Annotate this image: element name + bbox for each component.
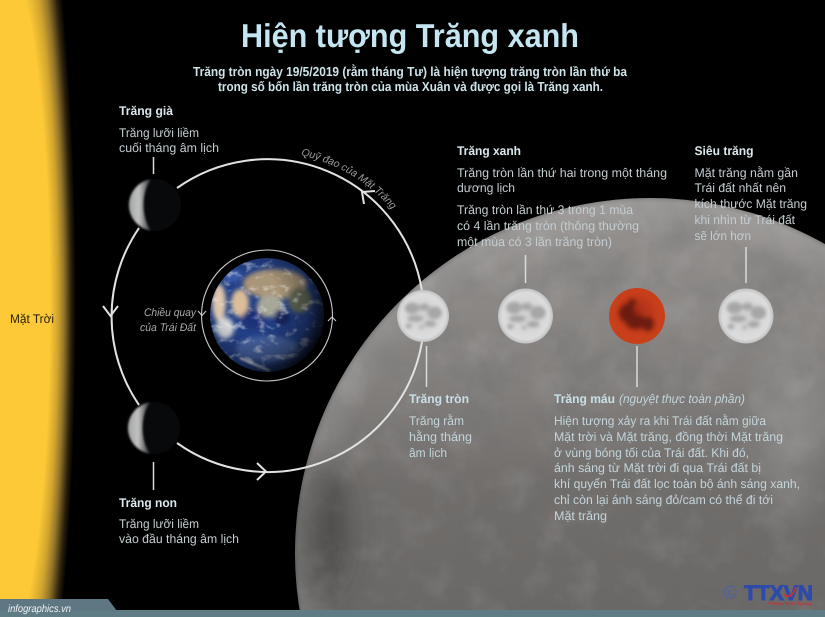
text: blue moon: một mùa có 3 lần trăng tròn): [457, 235, 612, 249]
arrow: orbit upper right: [362, 191, 375, 204]
text: young moon: vào đầu tháng âm lịch: [119, 532, 239, 546]
text: super moon: kích thước Mặt trăng: [694, 197, 807, 211]
footer source: infographics.vn: [8, 603, 71, 615]
full moon: [397, 290, 449, 342]
text: super moon: Mặt trăng nằm gần: [694, 166, 798, 180]
title: Hiện tượng Trăng xanh: [241, 17, 579, 54]
old crescent moon: [129, 179, 181, 231]
text: blood moon: ở vùng bóng tối của Trái đất. Khi đó,: [554, 446, 749, 460]
young crescent moon: [128, 402, 180, 454]
text: super moon: Trái đất nhất nên: [694, 181, 786, 195]
super moon: [718, 288, 774, 344]
text: full moon: âm lịch: [409, 446, 447, 460]
blue moon: [498, 288, 553, 344]
text: full moon: [409, 392, 472, 460]
earth globe: [208, 256, 326, 374]
text: young moon: Trăng non: [119, 496, 177, 510]
earth rotation label: của Trái Đất: [140, 322, 197, 334]
orbit label: Quỹ đạo của Mặt Trăng: [302, 149, 396, 210]
earth rotation label: Chiều quay: [144, 307, 197, 319]
text: old moon: [119, 104, 219, 155]
text: old moon: cuối tháng âm lịch: [119, 141, 219, 155]
TTXVN logo: c: [727, 587, 734, 597]
TTXVN logo: TTXVN: [744, 582, 813, 605]
subtitle: trong số bốn lần trăng tròn của mùa Xuân và được gọi là Trăng xanh.: [218, 79, 603, 94]
text: super moon: Siêu trăng: [694, 144, 754, 158]
text: blue moon: Trăng xanh: [457, 144, 521, 158]
text: full moon: hằng tháng: [409, 430, 472, 444]
text: super moon: [694, 144, 807, 243]
text: blood moon: Mặt trời và Mặt trăng, đồng thời Mặt trăng: [554, 430, 783, 444]
text: blood moon: khí quyển Trái đất lọc toàn bộ ánh sáng xanh,: [554, 477, 800, 491]
subtitle: [193, 64, 628, 94]
subtitle: Trăng tròn ngày 19/5/2019 (rằm tháng Tư) là hiện tượng trăng tròn lần thứ ba: [193, 64, 628, 79]
text: super moon: sẽ lớn hơn: [694, 229, 751, 243]
sun: yellow edge panel: [0, 0, 90, 617]
text: blood moon: Mặt trăng: [554, 509, 607, 523]
earth rotation label: [140, 307, 197, 334]
arrow: orbit left: [103, 306, 118, 316]
text: blue moon: dương lịch: [457, 181, 515, 195]
text: old moon: Trăng già: [119, 104, 173, 118]
text: full moon: Trăng tròn: [409, 392, 469, 406]
text: blood moon: ánh sáng từ Mặt trời đi qua Trái đất bị: [554, 461, 761, 475]
text: full moon: Trăng rằm: [409, 414, 464, 428]
text: blue moon: Trăng tròn lần thứ 3 trong 1 mùa: [457, 203, 633, 217]
TTXVN logo: Vietnam News Agency: [768, 601, 812, 606]
sun label: Mặt Trời: [10, 312, 54, 326]
text: old moon: Trăng lưỡi liềm: [119, 126, 199, 140]
text: blood moon: Hiện tượng xảy ra khi Trái đất nằm giữa: [554, 414, 766, 428]
leader lines: [154, 157, 746, 490]
arrow: orbit bottom: [257, 463, 266, 480]
rotation arrow left: [198, 311, 206, 316]
text: blood moon: Trăng máu: [554, 392, 615, 406]
footer band: [0, 599, 825, 617]
text: blue moon: [457, 144, 667, 249]
text: blue moon: Trăng tròn lần thứ hai trong một tháng: [457, 166, 667, 180]
text: young moon: Trăng lưỡi liềm: [119, 517, 199, 531]
earth with rotation ring: [198, 250, 336, 381]
text: blue moon: có 4 lần trăng tròn (thông thường: [457, 219, 639, 233]
moon orbit with arrows: [112, 159, 422, 472]
text: blood moon: [554, 392, 800, 523]
blood moon: [609, 288, 665, 344]
text: super moon: khi nhìn từ Trái đất: [694, 213, 795, 227]
rotation arrow right: [328, 317, 336, 321]
text: blood moon: chỉ còn lại ánh sáng đỏ/cam có thể đi tới: [554, 493, 773, 507]
text: blood moon: (nguyệt thực toàn phần): [619, 392, 745, 406]
footer tab: [0, 599, 117, 611]
text: young moon: [119, 496, 239, 546]
giant moon surface: [290, 190, 825, 617]
